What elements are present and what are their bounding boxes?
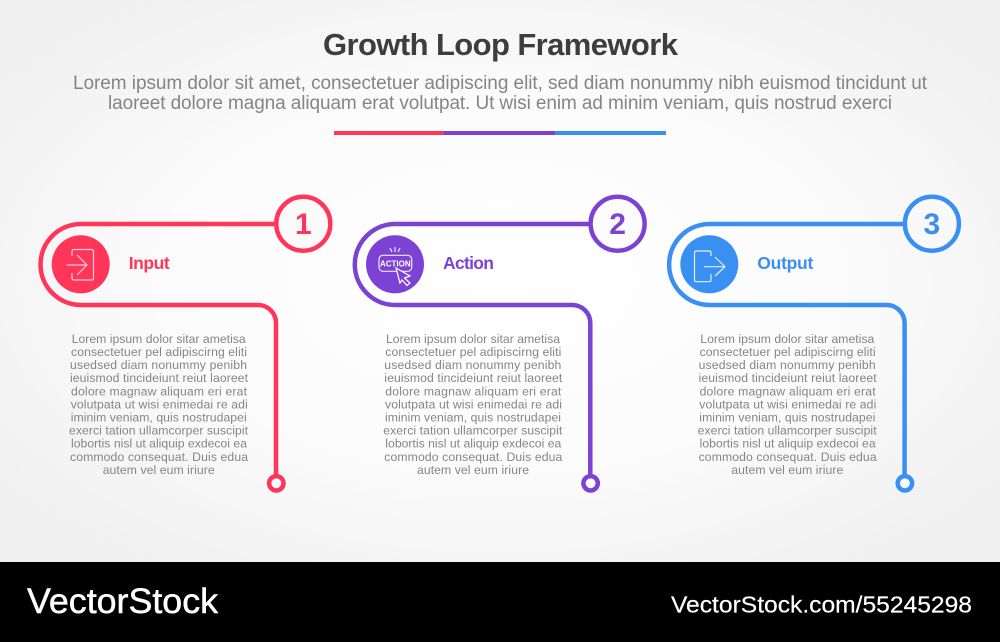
body text: ieuismod tincideiunt reiut laoreet bbox=[70, 371, 249, 385]
heading: output: Output bbox=[757, 253, 813, 273]
body text: exerci tation ullamcorper suscipit bbox=[69, 424, 249, 438]
body text: usedsed diam nonummy penibh bbox=[384, 358, 561, 372]
number badge 2: 2 bbox=[609, 208, 626, 241]
footer image id: VectorStock.com/55245298 bbox=[671, 592, 972, 618]
number badge 3: 3 bbox=[924, 208, 940, 241]
tricolor divider bbox=[334, 131, 666, 135]
body text: exerci tation ullamcorper suscipit bbox=[383, 424, 563, 438]
end ring bbox=[583, 476, 598, 490]
end ring bbox=[898, 476, 912, 490]
subtitle: laoreet dolore magna aliquam erat volutpat. Ut wisi enim ad minim veniam, quis nostrud exerci bbox=[108, 93, 892, 114]
icon: action button with cursor bbox=[366, 235, 424, 293]
body text: volutpata ut wisi enimedai re adi bbox=[699, 397, 876, 411]
body text: volutpata ut wisi enimedai re adi bbox=[71, 397, 248, 411]
heading: action: Action bbox=[443, 253, 494, 273]
connector line bbox=[669, 224, 906, 476]
body text: commodo consequat. Duis edua bbox=[70, 450, 248, 464]
body text bbox=[383, 332, 563, 477]
panel: output bbox=[669, 197, 959, 490]
number badge 1 bbox=[276, 197, 330, 251]
body text bbox=[698, 332, 877, 477]
connector line bbox=[40, 224, 277, 476]
number badge 2 bbox=[591, 197, 645, 251]
body text: usedsed diam nonummy penibh bbox=[699, 358, 876, 372]
body text: iminim veniam, quis nostrudapei bbox=[699, 410, 875, 424]
icon: enter arrow bbox=[52, 235, 110, 293]
connector line bbox=[355, 224, 591, 476]
body text: iminim veniam, quis nostrudapei bbox=[71, 410, 247, 424]
icon: action button with cursor: ACTION bbox=[380, 259, 411, 268]
body text: Lorem ipsum dolor sitar ametisa bbox=[386, 332, 560, 346]
body text: commodo consequat. Duis edua bbox=[384, 450, 563, 464]
body text: dolore magnaw aliquam eri erat bbox=[700, 384, 876, 398]
subtitle: Lorem ipsum dolor sit amet, consectetuer adipiscing elit, sed diam nonummy nibh euismod tincidunt ut bbox=[73, 73, 928, 94]
body text: Lorem ipsum dolor sitar ametisa bbox=[700, 332, 875, 346]
body text: lobortis nisl ut aliquip exdecoi ea bbox=[700, 437, 876, 451]
footer bar bbox=[0, 562, 1000, 642]
body text: ieuismod tincideiunt reiut laoreet bbox=[384, 371, 563, 385]
heading: input: Input bbox=[129, 253, 170, 273]
body text: exerci tation ullamcorper suscipit bbox=[698, 424, 877, 438]
panel: input bbox=[40, 197, 330, 490]
body text bbox=[69, 332, 249, 477]
body text: lobortis nisl ut aliquip exdecoi ea bbox=[385, 437, 562, 451]
body text: usedsed diam nonummy penibh bbox=[70, 358, 247, 372]
panel: action bbox=[355, 197, 645, 490]
body text: autem vel eum iriure bbox=[103, 463, 215, 477]
body text: ieuismod tincideiunt reiut laoreet bbox=[699, 371, 877, 385]
body text: autem vel eum iriure bbox=[417, 463, 529, 477]
subtitle bbox=[73, 73, 928, 114]
body text: iminim veniam, quis nostrudapei bbox=[385, 410, 561, 424]
number badge 3 bbox=[905, 197, 959, 251]
footer brand: VectorStock bbox=[27, 582, 219, 621]
body text: dolore magnaw aliquam eri erat bbox=[385, 384, 562, 398]
body text: autem vel eum iriure bbox=[731, 463, 844, 477]
body text: Lorem ipsum dolor sitar ametisa bbox=[72, 332, 246, 346]
body text: consectetuer pel adipiscirng eliti bbox=[71, 345, 247, 359]
body text: volutpata ut wisi enimedai re adi bbox=[385, 397, 562, 411]
body text: consectetuer pel adipiscirng eliti bbox=[385, 345, 561, 359]
body text: commodo consequat. Duis edua bbox=[699, 450, 877, 464]
body text: lobortis nisl ut aliquip exdecoi ea bbox=[71, 437, 247, 451]
title: Growth Loop Framework bbox=[323, 27, 679, 62]
number badge 1: 1 bbox=[295, 208, 312, 241]
icon: exit arrow bbox=[680, 235, 738, 293]
body text: dolore magnaw aliquam eri erat bbox=[71, 384, 248, 398]
end ring bbox=[269, 476, 283, 490]
body text: consectetuer pel adipiscirng eliti bbox=[700, 345, 876, 359]
